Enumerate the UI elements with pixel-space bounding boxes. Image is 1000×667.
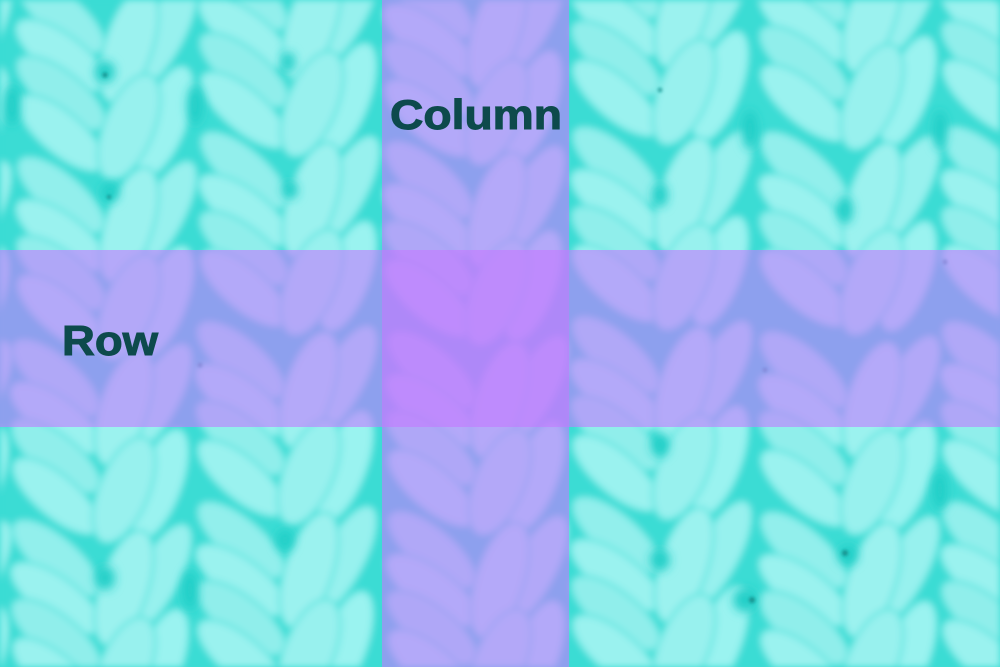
- label: Row: Row: [62, 317, 158, 364]
- label: Column: Column: [390, 91, 562, 138]
- column highlight band: [382, 0, 569, 667]
- row highlight band: [0, 250, 1000, 427]
